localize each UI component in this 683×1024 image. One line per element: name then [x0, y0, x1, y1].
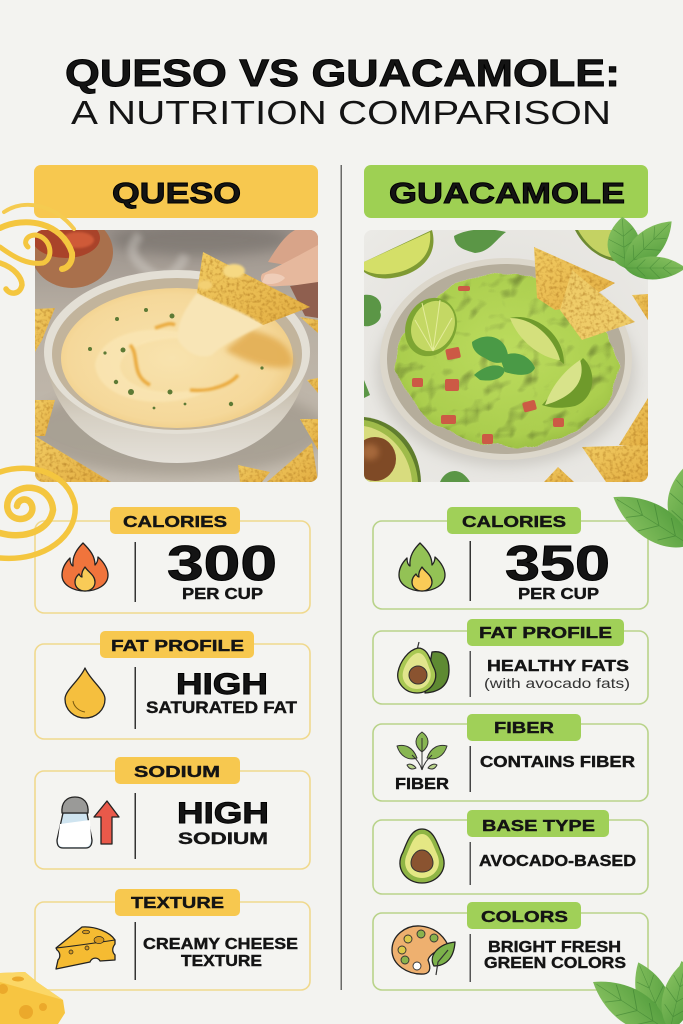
badge: queso texture	[115, 889, 240, 916]
badge: guacamole colors	[467, 902, 581, 929]
photo: guacamole bowl	[354, 229, 648, 482]
badge: queso sodium: SODIUM	[134, 764, 220, 781]
badge: queso calories	[110, 507, 240, 534]
title: QUESO VS GUACAMOLE:	[65, 53, 620, 95]
badge: guacamole fiber	[467, 714, 581, 741]
photo: queso dip with chip	[35, 230, 318, 482]
card: guacamole colors	[373, 913, 648, 990]
card: queso texture	[35, 902, 310, 990]
title	[65, 53, 620, 131]
icon: avocado	[400, 829, 444, 883]
icon: salt shaker and up arrow	[57, 797, 119, 848]
badge: queso texture: TEXTURE	[131, 895, 224, 912]
card: guacamole calories: PER CUP	[518, 586, 599, 603]
icon: flame	[62, 543, 108, 591]
card: guacamole fiber: CONTAINS FIBER	[480, 754, 635, 771]
bowl	[44, 270, 310, 463]
avocado halves	[354, 230, 625, 482]
center divider	[340, 165, 342, 990]
front tortilla chip	[560, 270, 635, 340]
decoration: cheese swirls, top left	[0, 205, 74, 293]
guacamole	[397, 273, 619, 447]
header: guacamole	[364, 165, 648, 218]
card: guacamole colors: GREEN COLORS	[484, 955, 626, 972]
badge: queso fat profile	[100, 631, 254, 658]
card: queso sodium: SODIUM	[178, 829, 268, 848]
card: guacamole calories: 350	[505, 537, 610, 591]
decoration: basil leaves, bottom right	[583, 956, 683, 1024]
icon: cheese wedge	[56, 927, 115, 969]
card: queso fat profile	[35, 644, 310, 739]
header: queso: QUESO	[112, 178, 241, 210]
cilantro garnish	[472, 336, 535, 381]
card: guacamole fiber	[373, 724, 648, 801]
salsa bowl	[35, 230, 113, 288]
card: queso calories: PER CUP	[182, 586, 263, 603]
card: queso fat profile: SATURATED FAT	[146, 699, 297, 717]
decoration: cheese block, bottom left	[0, 972, 65, 1024]
badge: guacamole fat profile	[467, 619, 624, 646]
icon: green flame	[399, 543, 445, 591]
card: guacamole fat profile: HEALTHY FATS	[487, 658, 629, 675]
badge: queso sodium	[115, 757, 240, 784]
card: guacamole fat profile: (with avocado fats)	[484, 675, 630, 691]
card: queso calories: 300	[167, 537, 277, 591]
cilantro	[364, 229, 506, 482]
badge: guacamole fiber: FIBER	[494, 720, 555, 737]
bowl	[380, 258, 632, 460]
card: queso sodium: HIGH	[177, 797, 269, 830]
title: A NUTRITION COMPARISON	[71, 94, 611, 131]
card: guacamole fiber: FIBER	[395, 776, 449, 793]
badge: guacamole calories: CALORIES	[462, 514, 566, 531]
header: guacamole: GUACAMOLE	[389, 178, 625, 210]
badge: queso calories: CALORIES	[123, 514, 227, 531]
badge: guacamole base type: BASE TYPE	[482, 818, 595, 835]
icon: sprout	[397, 732, 447, 770]
badge: guacamole base type	[467, 810, 609, 837]
card: guacamole calories	[373, 521, 648, 609]
badge: queso fat profile: FAT PROFILE	[111, 638, 244, 655]
chips	[35, 308, 318, 482]
tortilla chips	[534, 247, 648, 482]
header: queso	[34, 165, 318, 218]
card: guacamole colors: BRIGHT FRESH	[488, 939, 621, 956]
card: queso calories	[35, 521, 310, 613]
lime wedge	[364, 230, 433, 278]
dipping chip	[178, 252, 310, 357]
icon: avocado halves	[398, 642, 449, 693]
card: queso fat profile: HIGH	[176, 668, 268, 701]
icon: palette and leaf	[392, 926, 455, 975]
card: queso texture: TEXTURE	[181, 953, 262, 970]
decoration: basil leaves, middle right	[604, 463, 683, 560]
card: queso sodium	[35, 771, 310, 869]
badge: guacamole calories	[447, 507, 581, 534]
decoration: basil leaves, top right	[606, 211, 683, 279]
decoration: cheese spiral, middle left	[0, 468, 75, 558]
limes	[405, 298, 592, 408]
badge: guacamole colors: COLORS	[481, 909, 568, 926]
card: guacamole base type	[373, 820, 648, 894]
card: queso texture: CREAMY CHEESE	[143, 936, 298, 953]
icon: oil drop	[65, 668, 105, 718]
badge: guacamole fat profile: FAT PROFILE	[479, 625, 612, 642]
fingers	[261, 230, 318, 318]
card: guacamole fat profile	[373, 631, 648, 704]
card: guacamole base type: AVOCADO-BASED	[479, 853, 636, 870]
